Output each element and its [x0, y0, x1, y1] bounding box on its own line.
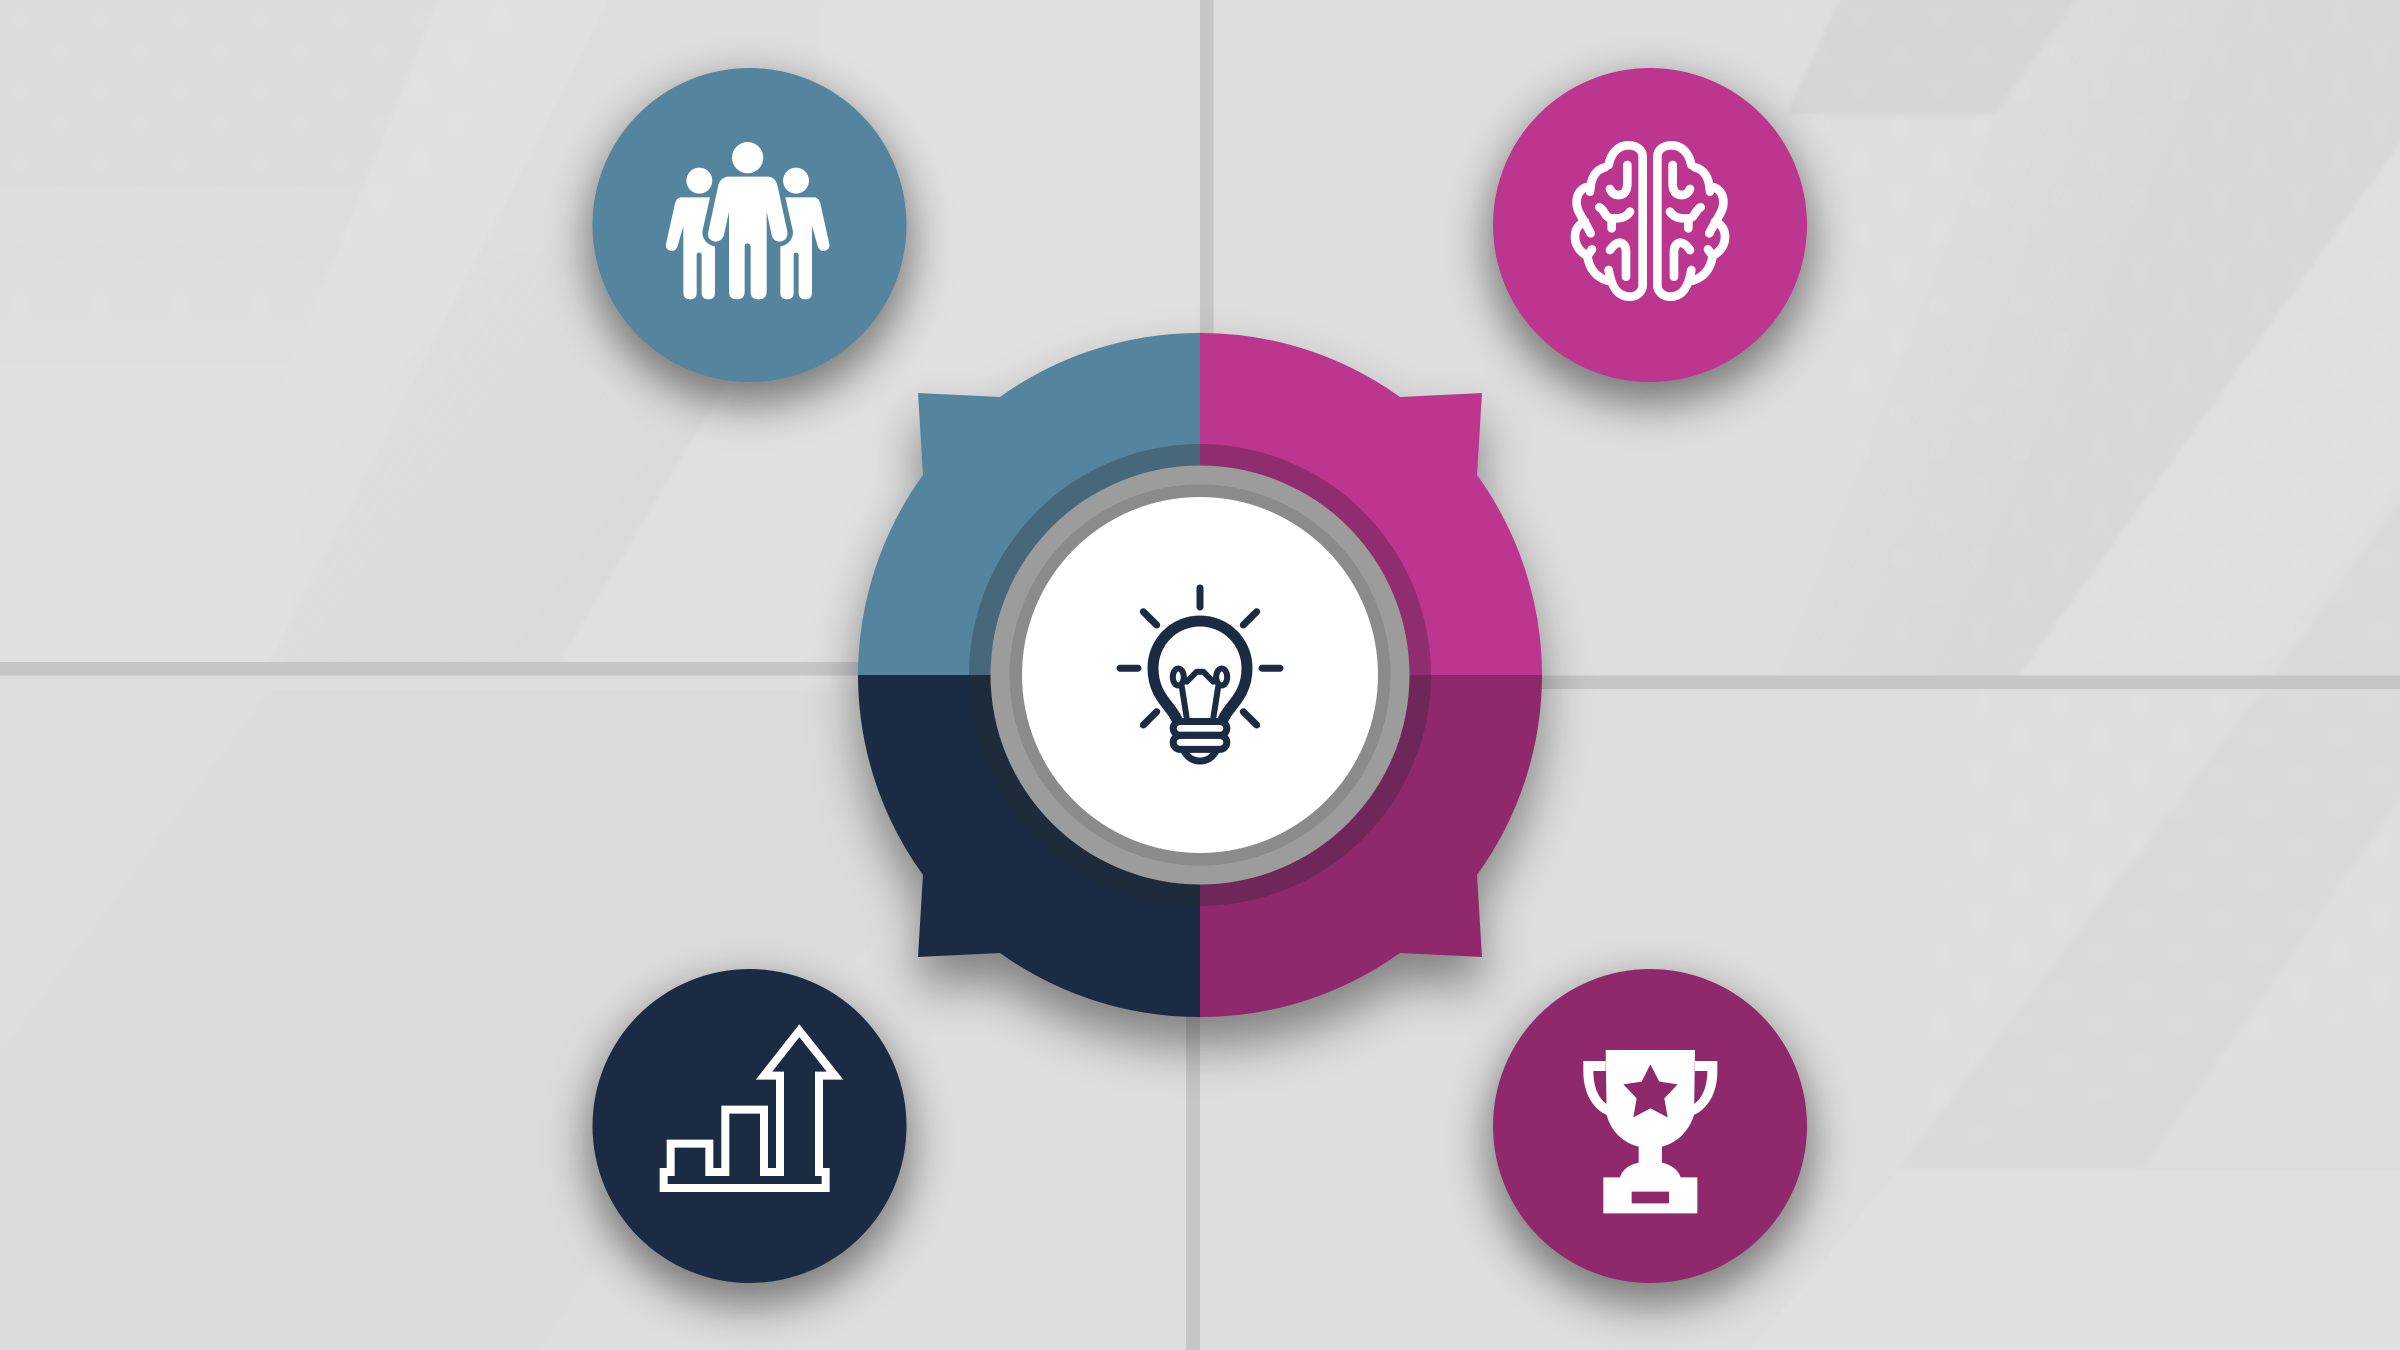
circle: trophy (purple)	[1488, 969, 1812, 1306]
hub quadrant: magenta	[1200, 333, 1542, 675]
hub shadow	[858, 360, 1542, 1046]
inner grey ring	[1010, 484, 1390, 866]
central hub	[858, 333, 1542, 1046]
hub quadrant: teal	[858, 333, 1200, 675]
icon: light bulb	[1120, 588, 1280, 761]
dark ring	[969, 444, 1431, 906]
icon: rising steps with arrow	[664, 1031, 835, 1188]
circle: brain (magenta)	[1488, 68, 1812, 405]
white centre disc	[1022, 497, 1378, 853]
hub quadrant: navy	[858, 675, 1200, 1017]
icon: brain	[1575, 145, 1725, 297]
grey ring	[990, 466, 1410, 884]
circle: growth (navy)	[588, 969, 912, 1306]
circle: people (teal)	[588, 68, 912, 405]
icon: group of people	[666, 142, 829, 299]
icon: trophy with star	[1583, 1050, 1717, 1213]
hub quadrant: purple	[1200, 675, 1542, 1017]
